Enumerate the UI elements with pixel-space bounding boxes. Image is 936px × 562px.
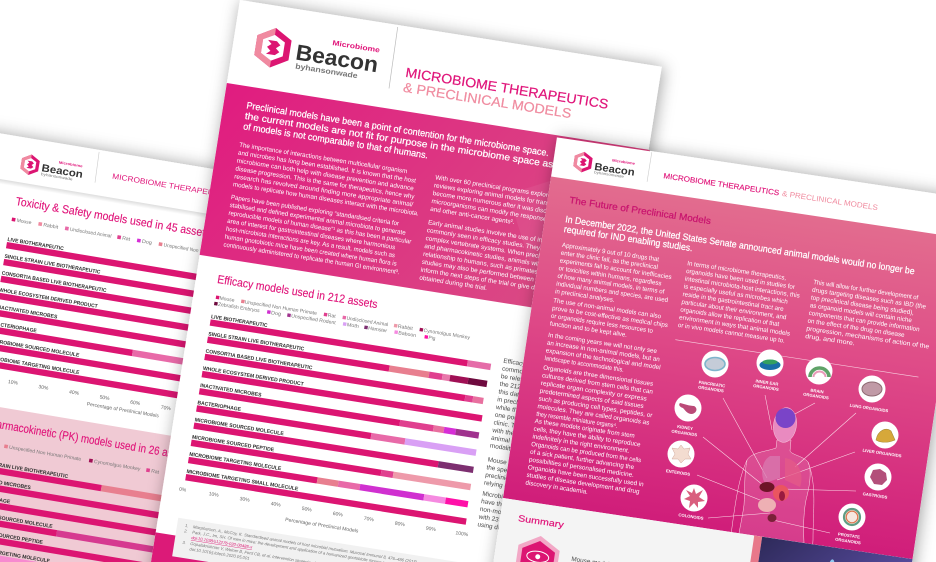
row: microbiome targeting molecule — [188, 452, 469, 507]
efficacy commentary text: while the other animals only — [494, 404, 575, 423]
icon: pancreatic organoids: PANCREATIC — [698, 380, 726, 388]
icon: enteroids — [666, 440, 694, 477]
page title: MICROBIOME THERAPEUTICS — [405, 65, 609, 112]
page title: MICROBIOME THERAPEUTICS — [112, 172, 233, 201]
right column text: This will allow for further development of — [813, 279, 919, 302]
left column text: landscape to accommodate this. — [544, 355, 624, 374]
legend: efficacy: Cynomolgus Monkey — [423, 328, 471, 341]
icon: inner ear organoids: INNER EAR — [755, 378, 779, 387]
left column text: studies of disease development and drug — [526, 472, 640, 496]
middle column text: organoids have been used in studies for — [686, 268, 796, 291]
legend: efficacy — [214, 295, 471, 347]
left column text: Organoids can be produced from the cells — [531, 441, 642, 464]
left column text: function and to be kept alive. — [549, 320, 628, 339]
row: whole ecosystem: WHOLE ECOSYSTEM DERIVED PRODUCT — [202, 366, 305, 388]
icon: prostate organoids: ORGANOIDS — [835, 537, 861, 545]
bladder — [768, 514, 776, 522]
lungs — [762, 456, 780, 483]
left column text: an increase in non-animal models, but an — [546, 340, 661, 363]
legend: PK — [4, 444, 169, 477]
left column text: cultures derived from stem cells that can — [542, 372, 654, 396]
left column text: and microbes has long been established. It is known that the host — [237, 150, 417, 185]
left column text: discovery in academia. — [525, 480, 589, 496]
left column text: host-microbiota interactions are key. As a result, models such as — [225, 226, 395, 259]
right column text: Early animal studies involve the use of in vivo models — [428, 219, 578, 250]
axis: toxicity percentage: 30% — [38, 384, 49, 392]
row: whole ecosystem — [202, 366, 483, 422]
right column text: commonly seen in efficacy studies. They provide — [426, 227, 563, 256]
right column text: on the effect of the drug on disease — [807, 318, 905, 339]
logo: Beacon — [253, 25, 381, 84]
row: microbiome sourced peptide: MICROBIOME SOURCED PEPTIDE — [192, 435, 275, 453]
left column text: Organoids are three dimensional tissues — [543, 365, 654, 388]
right column text: reviews exploring animal models for translational use have — [433, 182, 598, 215]
left column text: reproducible models of human disease”¹ as this has been a particular — [228, 210, 413, 246]
efficacy commentary text: this data show mouse models — [498, 389, 582, 409]
left column text: Papers have been published exploring “standardised criteria for — [230, 194, 400, 228]
left column text: or organoids require less resources to — [550, 313, 654, 335]
left column text: stabilised and defined experimental animal microbiota to generate — [229, 202, 407, 237]
efficacy commentary text: using different species. — [477, 521, 543, 538]
row: live biotherapeutic — [210, 314, 492, 370]
bar chart: toxicity: LIVE BIOTHERAPEUTIC — [7, 237, 64, 252]
legend: toxicity: Dog — [141, 239, 152, 246]
intro lead text — [243, 99, 628, 191]
legend: efficacy: Dog — [271, 310, 282, 318]
icon: colonoids — [678, 484, 708, 521]
right column text: drug, and more. — [805, 333, 855, 347]
left column text: of a sick patient, further advancing the — [530, 449, 635, 471]
legend: PK: Rat — [151, 468, 160, 476]
row: microbiome targeting small molecule — [185, 469, 468, 525]
middle column text: organoids allow the replication of that — [680, 306, 780, 328]
stomach — [773, 485, 789, 501]
lead text: required for IND enabling studies. — [563, 223, 693, 253]
icon: inner ear organoids — [753, 350, 784, 392]
panel: future of preclinical models page (right) — [480, 137, 936, 562]
panel: pink intro — [200, 83, 649, 322]
right column text: top preclinical disease being studied), — [810, 294, 915, 317]
row: microbiome sourced molecule — [193, 417, 475, 473]
middle column text: environment in ways that animal models — [679, 314, 790, 338]
intro lead text: Preclinical models have been a point of contention for the microbiome space. — [246, 99, 550, 158]
axis: efficacy percentage: Percentage of Preclinical Models — [285, 517, 359, 535]
axis: efficacy percentage: 50% — [301, 506, 313, 514]
row: single strain — [207, 331, 488, 387]
intestines — [758, 498, 776, 512]
legend: PK: Cynomolgus Monkey — [93, 459, 141, 473]
left column text: The importance of interactions between multicellular organism — [239, 142, 408, 175]
bar chart: toxicity: WHOLE ECOSYSTEM DERIVED PRODUCT — [0, 287, 99, 310]
axis: toxicity percentage: 80% — [191, 410, 202, 417]
intro lead text: the current models are not fit for purpose in the microbiome space as the microbiome — [244, 110, 626, 181]
footnotes — [172, 518, 554, 562]
page title: & PRECLINICAL MODELS — [781, 189, 878, 212]
logo: Beacon small: Beacon — [41, 162, 84, 181]
left column text: predetermined aspects of said tissues — [539, 388, 644, 410]
left column text: cells, they have the ability to reproduce — [533, 426, 641, 449]
axis: toxicity percentage: 60% — [130, 400, 141, 407]
left column text: individual numbers and species, are used — [556, 281, 669, 304]
axis: efficacy percentage: 90% — [425, 526, 437, 533]
efficacy commentary text: Mouse models lead across — [487, 456, 563, 475]
icon: liver organoids: LIVER ORGANOIDS — [862, 448, 902, 458]
efficacy commentary text — [476, 358, 595, 543]
logo: Beacon: Beacon — [294, 40, 380, 77]
left column text: indefinitely in the right environment. — [532, 433, 630, 455]
footnotes: 2. — [183, 528, 188, 534]
row: bacteriophage — [196, 400, 477, 456]
summary image — [739, 537, 913, 562]
right column text: become more numerous after it was discovered that — [432, 190, 579, 220]
logo: Beacon small: Beacon — [594, 161, 635, 179]
right column text: progression, mechanisms of action of the — [806, 325, 930, 351]
legend: efficacy: Moth — [346, 322, 359, 330]
page title — [663, 171, 878, 212]
icon: prostate organoids — [835, 504, 866, 545]
logo: Beacon small — [19, 153, 85, 184]
left column text: In the coming years we will not only see — [548, 332, 658, 355]
efficacy commentary text: modalities. — [489, 442, 521, 454]
brain — [776, 408, 796, 428]
logo: Beacon small — [573, 150, 637, 180]
right column text: components that can provide information — [808, 310, 920, 333]
logo: Beacon: Microbiome — [332, 38, 381, 54]
efficacy commentary text: in preclinical research lead — [497, 396, 573, 415]
left column text: Approximately 9 out of 10 drugs that — [562, 242, 660, 263]
legend: efficacy: Mouse — [219, 296, 235, 304]
row: microbiome targeting small molecule: MICROBIOME TARGETING SMALL MOLECULE — [186, 469, 299, 493]
left column text — [525, 242, 678, 504]
icon: kidney organoids — [671, 394, 702, 437]
legend: toxicity: Undisclosed Animal — [69, 227, 112, 240]
left column text: or toxicities within humans, regardless — [558, 265, 662, 287]
icon: summary hexagon — [513, 533, 561, 562]
icon: colonoids: COLONOIDS — [678, 512, 704, 521]
axis: toxicity percentage: Percentage of Preclinical Models — [86, 401, 160, 419]
footnotes: doi:10.1016/j.iotech.2020.05.001 — [189, 546, 250, 561]
left column text: microbiome can both help with disease prevention and advance — [236, 158, 415, 193]
left column text: continuously administered to replicate the human GI environment³. — [223, 241, 400, 276]
left column text: such as producing cell types, peptides, or — [538, 395, 654, 419]
logo: Beacon small: byhansonwade — [594, 170, 624, 179]
row: live biotherapeutic: LIVE BIOTHERAPEUTIC — [211, 314, 268, 329]
efficacy commentary text: relying on rodents. — [483, 480, 537, 495]
efficacy commentary text: with the wider use of the — [491, 427, 561, 445]
axis: efficacy percentage: 80% — [394, 521, 406, 528]
lead text: In December 2022, the United States Senate announced animal models would no longer be — [565, 213, 915, 276]
efficacy commentary text: Microbiome targeting assets — [482, 490, 562, 510]
page title: MICROBIOME THERAPEUTICS — [663, 171, 780, 197]
middle column text: or in vivo models cannot measure up to. — [677, 322, 786, 345]
middle column text: is especially useful as microbes which — [683, 283, 789, 306]
footnotes: 3. — [182, 540, 186, 545]
organoid body diagram — [666, 350, 902, 562]
icon: lung organoids — [849, 376, 889, 413]
legend: efficacy: Pig — [428, 335, 436, 342]
left column text: experiments fail to account for inefficacies — [559, 257, 672, 281]
efficacy commentary text: the spectrum of modalities — [486, 464, 561, 483]
heading: future: The Future of Preclinical Models — [569, 194, 712, 226]
heading: toxicity models: Toxicity & Safety models used in 45 assets — [15, 195, 211, 240]
logo: Beacon small: Microbiome — [612, 158, 635, 166]
leader lines — [697, 395, 856, 533]
icon: pancreatic organoids: ORGANOIDS — [698, 385, 724, 393]
legend: efficacy: Zebrafish Embryos — [218, 302, 260, 314]
left column text — [223, 142, 426, 278]
heading: summary: Summary — [518, 513, 565, 530]
right column text — [805, 279, 936, 358]
legend: toxicity: Rabbit — [43, 222, 59, 231]
row: microbiome sourced molecule: MICROBIOME SOURCED MOLECULE — [194, 417, 285, 437]
axis: efficacy percentage: 10% — [208, 491, 220, 499]
left column text: The use of non-animal models can also — [553, 297, 662, 320]
logo: Beacon small: Microbiome — [59, 160, 83, 168]
icon: gastroids — [862, 464, 892, 500]
right column text: complex vertebrate systems. When preclinical safety — [425, 235, 574, 265]
row: inactivated microbes — [199, 383, 480, 439]
row: bacteriophage: BACTERIOPHAGE — [197, 400, 242, 413]
left column text: human gnotobiotic mice have been created where human flora is — [224, 234, 397, 268]
middle column text: In terms of microbiome therapeutics, — [687, 260, 787, 282]
icon: brain organoids — [803, 358, 832, 400]
left column text: replicate organ complexity or express — [540, 380, 647, 403]
logo: Beacon: byhansonwade — [295, 62, 358, 80]
efficacy commentary text: have the widest use of — [481, 498, 545, 515]
page title: & PRECLINICAL MODELS — [402, 80, 573, 121]
bar chart: PK — [0, 458, 213, 562]
efficacy commentary text: non-mouse models overall — [479, 506, 554, 524]
row: consortia: CONSORTIA BASED LIVE BIOTHERAPEUTIC — [205, 349, 313, 371]
bar chart: toxicity — [0, 237, 249, 407]
efficacy commentary text: with 23 programs — [477, 513, 528, 528]
logo: Beacon small: byhansonwade — [41, 172, 73, 181]
legend: efficacy: Baboon — [398, 330, 417, 339]
axis: toxicity percentage: 70% — [160, 405, 172, 412]
row: single strain: SINGLE STRAIN LIVE BIOTHERAPEUTIC — [208, 331, 305, 353]
left column text: possibilities of personalised medicine. — [528, 456, 635, 479]
left column text: enter the clinic fail, as the preclinical — [560, 250, 658, 271]
icon: pancreatic organoids — [698, 350, 728, 393]
right column text: as organoid models will contain niche — [809, 302, 913, 324]
axis: efficacy percentage: 0% — [179, 487, 187, 494]
page title — [402, 65, 609, 127]
bar chart: toxicity: CONSORTIA BASED LIVE BIOTHERAPEUTIC — [1, 271, 107, 294]
right column text: microorganisms can modify the response to checkpoint — [431, 198, 586, 229]
left column text: molecules. They are called organoids as — [537, 403, 650, 427]
right column text: and other anti-cancer agents². — [430, 206, 515, 226]
efficacy commentary text: Efficacy models are the most — [503, 358, 585, 377]
axis: toxicity percentage: 40% — [69, 389, 80, 397]
left column text: expansion of the technological and model — [545, 347, 661, 371]
efficacy commentary text: one portion of the total — [494, 412, 558, 428]
left column text: of how many animal models, in terms of — [557, 273, 665, 296]
efficacy commentary text: animal models across all — [491, 435, 561, 453]
liver — [760, 482, 774, 492]
legend: PK: Unspecified Non Human Primate — [9, 445, 82, 463]
intro lead text: of models is not comparable to that of humans. — [243, 120, 429, 160]
axis: efficacy percentage — [176, 487, 469, 552]
panel: pink future section — [503, 177, 936, 559]
middle column text: intestinal microbiota-host interactions, this — [684, 276, 800, 300]
efficacy commentary text: the 212 assets analysed in — [499, 381, 575, 400]
legend: efficacy: Unspecified Non Human Primate — [244, 300, 318, 317]
legend: efficacy: Rabbit — [397, 324, 414, 332]
icon: brain organoids: BRAIN — [810, 388, 824, 394]
right column text: drugs targeting diseases such as IBD (the — [812, 287, 927, 311]
icon: inner ear organoids: ORGANOIDS — [753, 383, 779, 392]
right column text: and pharmacokinetic studies, animals with a close — [424, 243, 565, 272]
left column text: As these models originate from stem — [534, 418, 635, 440]
icon: liver organoids — [862, 422, 902, 458]
axis: toxicity percentage: 50% — [99, 394, 111, 402]
axis: toxicity percentage — [0, 374, 202, 426]
left column text: prove to be cost-effective as medical chips — [552, 305, 668, 329]
left column text: disease progression. This is the same for therapeutics, hence why — [235, 165, 416, 201]
axis: toxicity percentage: 10% — [7, 379, 19, 387]
footnotes: 1. — [185, 523, 189, 528]
heading: efficacy models: Efficacy models used in 212 assets — [216, 273, 379, 311]
icon: prostate organoids: PROSTATE — [838, 531, 861, 540]
right column text: inform the next steps of the trial or give data — [420, 267, 544, 293]
axis: efficacy percentage: 30% — [239, 496, 251, 504]
panel: pharmacokinetic section — [0, 392, 227, 562]
row: inactivated microbes: INACTIVATED MICROBES — [200, 383, 262, 399]
legend: efficacy: Undisclosed Animal — [346, 316, 388, 328]
panel: efficacy page (middle) — [140, 0, 662, 562]
left column text: models to replicate how human diseases interact with the microbiota. — [232, 181, 419, 218]
left column text: research has revolved around finding more appropriate animal/ — [234, 173, 414, 209]
efficacy commentary text: commonly used models and can — [502, 365, 594, 387]
right column text — [419, 174, 600, 307]
axis: efficacy percentage: 60% — [332, 511, 344, 518]
legend: efficacy: Rat — [327, 313, 337, 320]
axis: efficacy percentage: 70% — [363, 516, 375, 523]
right column text: studies may also be performed between species to — [421, 259, 565, 288]
right column text: obtained during the trial. — [419, 275, 488, 292]
middle column text — [677, 260, 802, 346]
icon: enteroids: ENTEROIDS — [666, 468, 691, 477]
legend: toxicity: Mouse — [16, 218, 32, 226]
middle column text: particular about their environment, and — [681, 299, 787, 321]
right column text: relationship to humans, such as primates are used — [423, 251, 565, 280]
legend: toxicity: Rat — [122, 236, 131, 243]
bar chart: toxicity: SINGLE STRAIN LIVE BIOTHERAPEUTIC — [4, 254, 101, 276]
efficacy commentary text: be relevant to human disease. — [500, 373, 586, 393]
row: microbiome targeting molecule: MICROBIOME TARGETING MOLECULE — [189, 452, 282, 472]
icon: brain organoids: ORGANOIDS — [803, 392, 829, 400]
efficacy commentary text: clinic. The data is consistent — [493, 419, 573, 439]
middle column text: reside in the gastrointestinal tract are — [682, 291, 784, 313]
legend: toxicity: Unspecified Non Human Primate — [163, 242, 233, 260]
human body figure — [726, 406, 814, 562]
left column text: they resemble miniature organs⁴. — [536, 411, 618, 430]
bar chart: efficacy — [185, 314, 492, 525]
panel: toxicity and pharmacokinetic page (left) — [0, 126, 271, 562]
legend: toxicity — [11, 217, 233, 260]
row: consortia — [204, 349, 485, 404]
left column text: in preclinical analyses. — [555, 288, 615, 304]
row: microbiome sourced peptide — [191, 435, 472, 490]
icon: lung organoids: LUNG ORGANOIDS — [849, 403, 889, 413]
axis: efficacy percentage: 100% — [455, 530, 469, 538]
icon: gastroids: GASTROIDS — [862, 491, 888, 500]
left column text: area of interest for gastrointestinal diseases where harmonious — [227, 218, 396, 251]
panel: summary — [480, 498, 913, 562]
footnotes: doi:10.1038/s12276-020-00485-x — [191, 535, 254, 550]
legend: efficacy: Hamster — [368, 326, 388, 334]
legend: efficacy: Unspecified Rodent — [291, 313, 337, 326]
left column text: Organoids have been successfully used in — [527, 464, 644, 488]
right column text: With over 60 preclinical programs exploring animal — [435, 174, 577, 204]
icon: kidney organoids: ORGANOIDS — [671, 429, 698, 437]
icon: kidney organoids: KIDNEY — [677, 424, 693, 431]
efficacy commentary text: preclinically, with most — [485, 472, 548, 489]
axis: efficacy percentage: 40% — [270, 501, 282, 509]
kidney organ — [779, 491, 785, 501]
